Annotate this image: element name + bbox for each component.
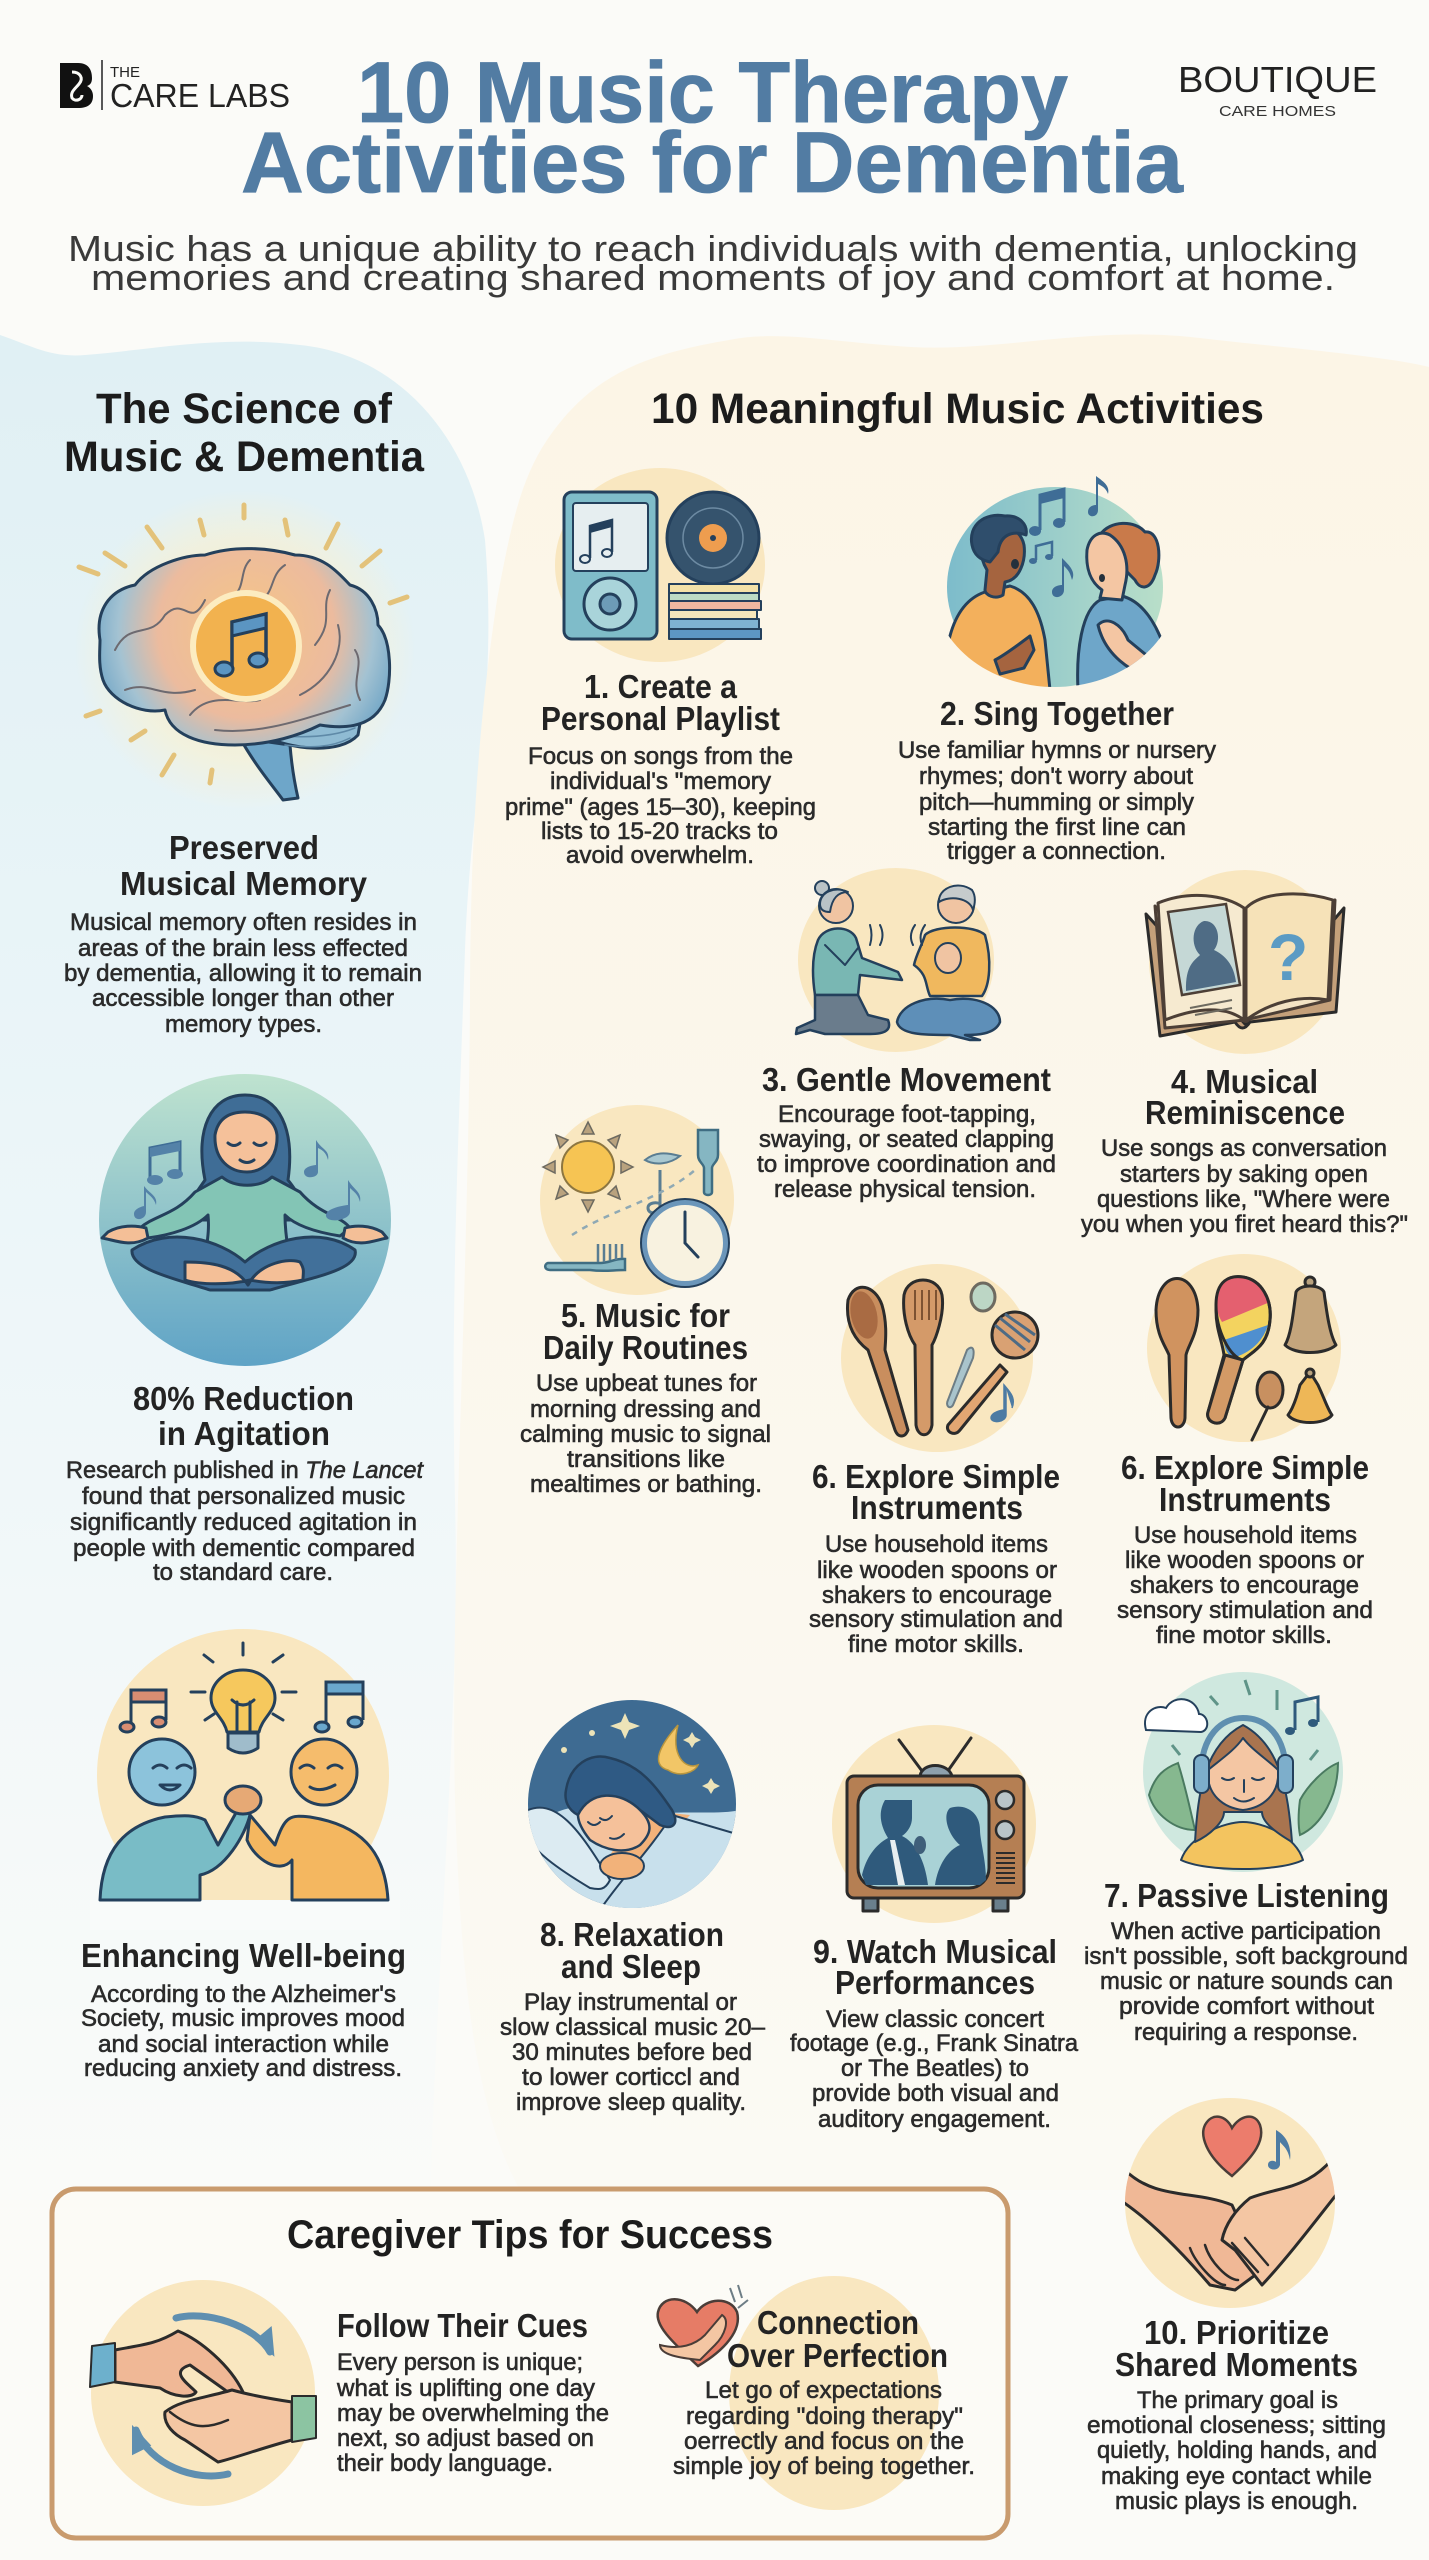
text: activity 7: requiring a response.	[1134, 2019, 1358, 2046]
text: activity 2: 2. Sing Together	[940, 695, 1174, 732]
subtitle	[68, 228, 1358, 298]
text: activity 8: improve sleep quality.	[516, 2089, 746, 2116]
text: activity 6 second: sensory stimulation and	[1117, 1597, 1373, 1624]
text: activity 5: 5. Music for	[561, 1297, 730, 1334]
logo: The Care Labs: THE	[110, 64, 140, 81]
title: 10 Music Therapy	[357, 45, 1068, 141]
text: enhancing well-being: reducing anxiety and distress.	[84, 2055, 402, 2082]
text: activity 9	[790, 1933, 1079, 2133]
text: activity 10: music plays is enough.	[1115, 2488, 1358, 2515]
logo: The Care Labs: CARE LABS	[110, 77, 290, 114]
text: activity 1: prime" (ages 15–30), keeping	[505, 794, 816, 821]
text: activity 9: View classic concert	[826, 2006, 1044, 2033]
text: activity 3: 3. Gentle Movement	[762, 1061, 1051, 1098]
icon: daily routines	[540, 1105, 734, 1295]
icon: playlist player and vinyl	[555, 468, 765, 662]
text: connection over perfection: Connection	[757, 2304, 919, 2341]
text: activity 6 first: Use household items	[825, 1531, 1048, 1558]
heading: science	[64, 385, 425, 481]
text: enhancing well-being: and social interaction while	[98, 2031, 389, 2058]
icon: memory book: ?	[1268, 920, 1308, 994]
text: activity 7: music or nature sounds can	[1100, 1968, 1393, 1995]
panel: activities background	[454, 334, 1429, 2190]
text: activity 2: starting the first line can	[928, 814, 1186, 841]
icon: two friends with lightbulb	[90, 1629, 400, 1930]
text: reduction in agitation: found that personalized music	[82, 1483, 405, 1510]
text: activity 1: lists to 15-20 tracks to	[541, 818, 778, 845]
text: preserved musical memory	[64, 829, 422, 1038]
text: connection over perfection	[673, 2304, 975, 2480]
icon: cream circle and heart in hand	[658, 2276, 939, 2510]
text: activity 8: 30 minutes before bed	[512, 2039, 752, 2066]
text: activity 3: swaying, or seated clapping	[759, 1126, 1054, 1153]
text: activity 5: Use upbeat tunes for	[536, 1370, 757, 1397]
text: follow their cues: Every person is unique;	[337, 2349, 583, 2376]
text: activity 10: The primary goal is	[1137, 2387, 1338, 2414]
text: activity 10: making eye contact while	[1101, 2463, 1372, 2490]
text: activity 1: individual's "memory	[550, 768, 771, 795]
text: connection over perfection: Let go of expectations	[705, 2377, 942, 2404]
text: reduction in agitation: to standard care.	[153, 1559, 333, 1586]
text: activity 9: 9. Watch Musical	[813, 1933, 1057, 1970]
text: activity 6 second: like wooden spoons or	[1125, 1547, 1364, 1574]
text: activity 4	[1081, 1063, 1408, 1238]
text: activity 7: isn't possible, soft background	[1084, 1943, 1408, 1970]
icon: two hands with arrows	[90, 2280, 316, 2506]
icon: memory book	[1146, 870, 1344, 1054]
text: activity 10: 10. Prioritize	[1144, 2314, 1329, 2351]
text: enhancing well-being	[81, 1937, 406, 2082]
text: activity 4: you when you firet heard this?"	[1081, 1211, 1408, 1238]
text: enhancing well-being: Enhancing Well-being	[81, 1937, 406, 1974]
text: follow their cues: may be overwhelming the	[337, 2400, 609, 2427]
text: activity 6 first: shakers to encourage	[822, 1582, 1052, 1609]
text: reduction in agitation: Research published in The Lancet	[66, 1457, 424, 1484]
text: activity 6 first: like wooden spoons or	[817, 1557, 1057, 1584]
icon: sleeping woman	[524, 1700, 740, 1910]
text: activity 7	[1084, 1877, 1408, 2046]
text: reduction in agitation	[66, 1380, 424, 1586]
title	[241, 45, 1184, 211]
text: activity 3: to improve coordination and	[757, 1151, 1056, 1178]
text: activity 9: Performances	[835, 1964, 1035, 2001]
icon: woman listening with headphones	[1143, 1672, 1343, 1872]
text: connection over perfection: Over Perfection	[727, 2337, 948, 2374]
text: activity 1: avoid overwhelm.	[566, 842, 754, 869]
text: activity 10	[1087, 2314, 1386, 2515]
text: follow their cues	[336, 2307, 609, 2477]
text: activity 2: Use familiar hymns or nursery	[898, 737, 1216, 764]
text: activity 1	[505, 668, 816, 869]
text: activity 3: Encourage foot-tapping,	[778, 1101, 1036, 1128]
text: activity 3: release physical tension.	[774, 1176, 1036, 1203]
text: reduction in agitation: significantly reduced agitation in	[70, 1509, 417, 1536]
text: activity 8: to lower corticcl and	[522, 2064, 740, 2091]
text: activity 9: provide both visual and	[812, 2080, 1059, 2107]
text: activity 6 first: sensory stimulation and	[809, 1606, 1063, 1633]
text: activity 3	[757, 1061, 1056, 1203]
text: activity 8: slow classical music 20–	[500, 2014, 766, 2041]
text: activity 2: pitch—humming or simply	[919, 789, 1194, 816]
text: activity 8: and Sleep	[561, 1948, 701, 1985]
text: activity 1: Focus on songs from the	[528, 743, 793, 770]
text: activity 10: quietly, holding hands, and	[1097, 2437, 1377, 2464]
text: activity 2	[898, 695, 1216, 865]
icon: gentle movement	[796, 868, 1000, 1052]
text: activity 8: Play instrumental or	[524, 1989, 737, 2016]
text: activity 6 second: fine motor skills.	[1156, 1622, 1332, 1649]
text: reduction in agitation: people with dementic compared	[73, 1535, 415, 1562]
text: activity 6 second: Use household items	[1134, 1522, 1357, 1549]
logo: The Care Labs	[60, 60, 290, 114]
logo: Boutique Care Homes	[1178, 59, 1377, 120]
text: activity 6 second: 6. Explore Simple	[1121, 1449, 1369, 1486]
text: activity 9: footage (e.g., Frank Sinatra	[790, 2030, 1079, 2057]
icon: meditating woman	[99, 1074, 391, 1366]
heading: science: Music & Dementia	[64, 433, 425, 481]
text: activity 7: When active participation	[1111, 1918, 1381, 1945]
text: activity 9: auditory engagement.	[818, 2106, 1051, 2133]
text: reduction in agitation: in Agitation	[158, 1415, 330, 1452]
text: activity 6 first: Instruments	[851, 1489, 1023, 1526]
text: activity 8	[500, 1916, 766, 2116]
icon: holding hands with heart	[1120, 2098, 1340, 2308]
text: activity 6 second: shakers to encourage	[1130, 1572, 1359, 1599]
text: preserved musical memory: Preserved	[169, 829, 319, 866]
text: preserved musical memory: Musical Memory	[120, 865, 368, 902]
icon: two people singing	[944, 476, 1170, 690]
text: preserved musical memory: by dementia, allowing it to remain	[64, 960, 422, 987]
title: Activities for Dementia	[241, 115, 1184, 211]
text: connection over perfection: oerrectly and focus on the	[684, 2428, 964, 2455]
text: activity 5: mealtimes or bathing.	[530, 1471, 762, 1498]
text: activity 1: 1. Create a	[584, 668, 738, 705]
text: follow their cues: their body language.	[337, 2450, 553, 2477]
text: activity 6 first: 6. Explore Simple	[812, 1458, 1060, 1495]
text: connection over perfection: regarding "doing therapy"	[686, 2403, 963, 2430]
text: activity 6 second: Instruments	[1159, 1481, 1331, 1518]
logo: Boutique Care Homes: CARE HOMES	[1219, 103, 1336, 120]
text: preserved musical memory: Musical memory often resides in	[70, 909, 417, 936]
text: activity 4: Reminiscence	[1145, 1094, 1345, 1131]
text: follow their cues: what is uplifting one day	[336, 2375, 595, 2402]
text: activity 5	[520, 1297, 771, 1498]
text: activity 1: Personal Playlist	[541, 700, 780, 737]
text: activity 4: starters by saking open	[1120, 1161, 1368, 1188]
text: follow their cues: next, so adjust based on	[337, 2425, 594, 2452]
heading: caregiver tips: Caregiver Tips for Success	[287, 2213, 773, 2257]
icon: spoons and maraca	[841, 1264, 1038, 1452]
text: follow their cues: Follow Their Cues	[337, 2307, 588, 2344]
heading: science: The Science of	[96, 385, 393, 433]
text: activity 4: 4. Musical	[1171, 1063, 1318, 1100]
text: enhancing well-being: Society, music improves mood	[81, 2005, 405, 2032]
text: activity 2: trigger a connection.	[947, 838, 1166, 865]
text: activity 10: Shared Moments	[1115, 2346, 1358, 2383]
logo: Boutique Care Homes: BOUTIQUE	[1178, 59, 1377, 100]
icon: brain with note	[75, 490, 415, 810]
text: activity 5: Daily Routines	[543, 1329, 748, 1366]
text: activity 6 first: fine motor skills.	[848, 1631, 1024, 1658]
text: activity 4: Use songs as conversation	[1101, 1135, 1387, 1162]
icon: vintage television	[832, 1725, 1036, 1923]
panel: caregiver tips	[52, 2189, 1008, 2538]
text: activity 8: 8. Relaxation	[540, 1916, 724, 1953]
text: enhancing well-being: According to the Alzheimer's	[91, 1981, 396, 2008]
heading: activities: 10 Meaningful Music Activities	[651, 385, 1264, 433]
text: preserved musical memory: areas of the brain less effected	[78, 935, 408, 962]
text: activity 9: or The Beatles) to	[841, 2055, 1029, 2082]
subtitle: Music has a unique ability to reach individuals with dementia, unlocking	[68, 228, 1358, 269]
text: preserved musical memory: accessible longer than other	[92, 985, 394, 1012]
text: activity 7: 7. Passive Listening	[1104, 1877, 1389, 1914]
text: preserved musical memory: memory types.	[165, 1011, 322, 1038]
text: activity 5: calming music to signal	[520, 1421, 771, 1448]
text: activity 10: emotional closeness; sitting	[1087, 2412, 1386, 2439]
text: activity 2: rhymes; don't worry about	[919, 763, 1193, 790]
text: reduction in agitation: 80% Reduction	[133, 1380, 354, 1417]
text: activity 5: morning dressing and	[530, 1396, 761, 1423]
panel: science background	[0, 335, 488, 2200]
text: activity 4: questions like, "Where were	[1097, 1186, 1390, 1213]
text: activity 5: transitions like	[567, 1446, 725, 1473]
icon: spoon maraca and bells	[1147, 1254, 1341, 1442]
text: activity 6 first	[809, 1458, 1063, 1658]
subtitle: memories and creating shared moments of joy and comfort at home.	[91, 257, 1335, 298]
text: connection over perfection: simple joy of being together.	[673, 2453, 975, 2480]
text: activity 6 second	[1117, 1449, 1373, 1649]
text: activity 7: provide comfort without	[1119, 1993, 1374, 2020]
